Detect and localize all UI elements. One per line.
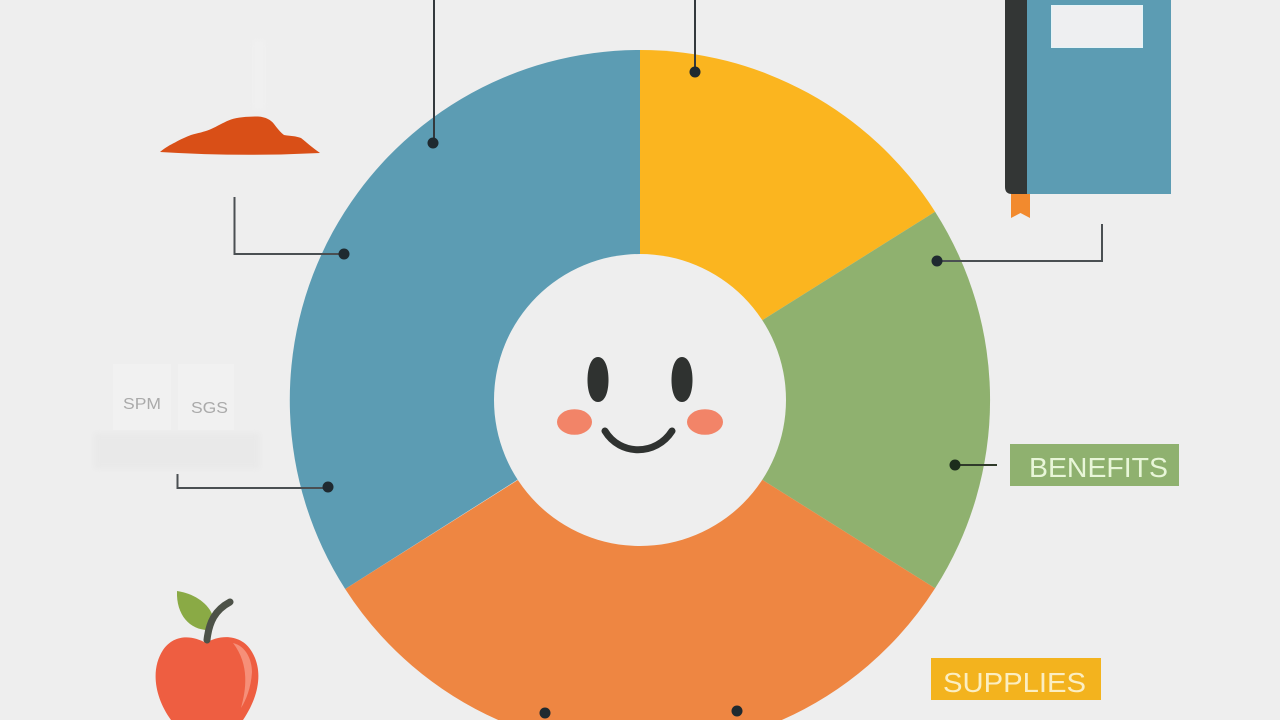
connector: labels left	[178, 474, 334, 492]
faint cards with illegible marks	[94, 364, 260, 469]
right cheek	[687, 409, 723, 435]
icon: orange mound	[160, 40, 320, 155]
label: supplies: SUPPLIES	[943, 667, 1086, 698]
connector: top right	[690, 0, 700, 78]
connector: bottom right dot	[732, 706, 742, 716]
icon: book	[1005, 0, 1171, 218]
center circle	[494, 254, 786, 546]
segment: green	[640, 212, 990, 588]
connector: top left	[428, 0, 438, 148]
right card marks: SGS	[191, 400, 228, 417]
bookmark	[1011, 193, 1030, 218]
book spine	[1005, 0, 1027, 194]
left card	[113, 364, 171, 430]
icon: apple	[156, 591, 258, 720]
label: benefits: BENEFITS	[1029, 452, 1168, 483]
mound	[160, 116, 320, 155]
apple highlight	[233, 643, 252, 708]
faint steam	[252, 40, 266, 110]
smiley face	[557, 357, 723, 450]
smile	[605, 431, 672, 450]
left card marks: SPM	[123, 396, 161, 413]
apple body	[156, 637, 258, 720]
left cheek	[557, 409, 592, 435]
segment: blue	[290, 50, 640, 589]
label: benefits	[1010, 444, 1179, 486]
base strip	[94, 433, 260, 469]
right card	[178, 364, 234, 430]
donut chart	[290, 50, 990, 720]
stem	[207, 602, 230, 640]
connector: lamp	[234, 197, 350, 260]
right eye	[672, 357, 692, 402]
segment: orange	[345, 403, 935, 720]
book cover	[1027, 0, 1171, 194]
connector: book	[932, 224, 1102, 266]
book label	[1052, 6, 1142, 48]
connector: bottom left dot	[540, 708, 550, 718]
connector: benefits	[950, 460, 997, 470]
segment: yellow	[640, 50, 935, 397]
label: supplies	[931, 658, 1101, 700]
leaf	[177, 591, 212, 630]
left eye	[588, 357, 608, 402]
